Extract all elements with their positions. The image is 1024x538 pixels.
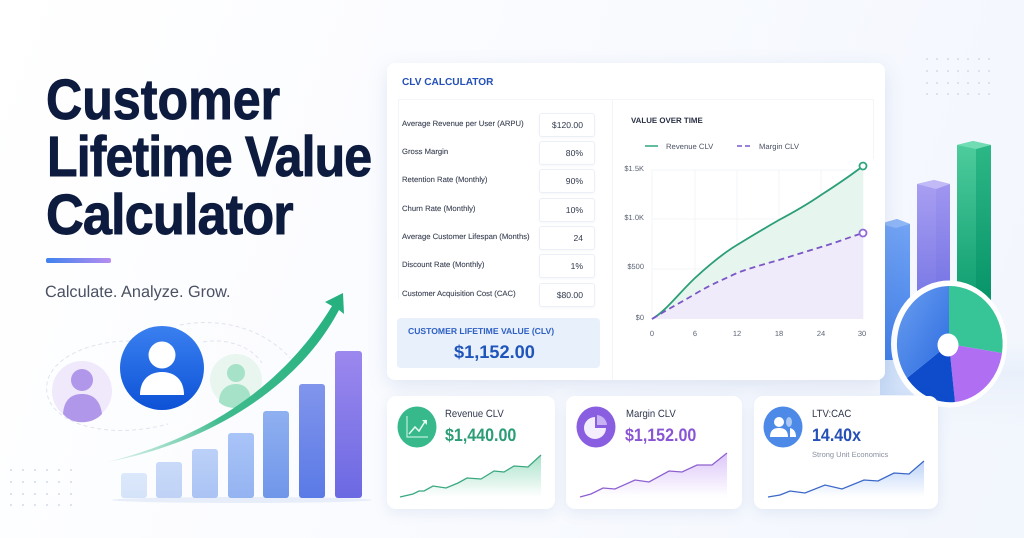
3D bar: purple — [917, 180, 950, 310]
sparkline: LTV to CAC — [768, 461, 924, 497]
icon: green line chart — [398, 406, 436, 448]
margin line — [652, 233, 863, 319]
result box: customer lifetime value: $1,152.00 — [454, 342, 535, 362]
dots: top right — [926, 58, 990, 95]
input rows: $80.00 — [557, 290, 583, 300]
input rows: Average Customer Lifespan (Months) — [402, 232, 530, 241]
pie chart — [891, 280, 1007, 408]
input rows: 90% — [566, 176, 583, 186]
chart axis labels: 0 — [650, 329, 654, 338]
chart axis labels: 12 — [733, 329, 741, 338]
chart grid — [652, 170, 863, 319]
chart legend: Margin CLV — [759, 142, 800, 151]
chart axis labels: 6 — [693, 329, 697, 338]
input rows: Retention Rate (Monthly) — [402, 175, 487, 184]
margin area — [652, 233, 863, 319]
pale shadow behind pie — [880, 340, 1024, 450]
revenue line — [652, 166, 863, 319]
3D bar: green — [957, 141, 991, 300]
end markers — [860, 162, 866, 236]
chart axis labels: $1.5K — [624, 164, 644, 173]
card: revenue CLV — [387, 396, 555, 509]
dots: bottom left — [10, 469, 72, 506]
card note: Strong Unit Economics — [812, 450, 888, 459]
input rows: Gross Margin — [402, 147, 448, 156]
sparkline: revenue — [400, 455, 541, 497]
3D bar: blue — [880, 219, 910, 360]
chart legend — [645, 142, 800, 151]
chart axis labels: $500 — [627, 262, 644, 271]
arrow: growth trend — [107, 293, 344, 462]
card: margin CLV — [566, 396, 742, 509]
input rows: 80% — [566, 148, 583, 158]
input rows: 1% — [571, 261, 583, 271]
chart axis labels: $0 — [636, 313, 644, 322]
chart heading: VALUE OVER TIME — [631, 116, 703, 125]
icon: purple pie chart — [576, 406, 616, 448]
sparklines — [400, 452, 924, 498]
panel: CLV calculator — [387, 63, 885, 380]
chart legend: Revenue CLV — [666, 142, 714, 151]
icon: blue users — [764, 406, 802, 448]
title: Calculator — [46, 183, 293, 247]
input rows — [402, 113, 595, 307]
chart axis labels: 18 — [775, 329, 783, 338]
bar chart: growth bars — [112, 351, 372, 503]
input rows: $120.00 — [552, 120, 583, 130]
chart: value over time — [624, 116, 868, 338]
revenue area — [652, 166, 863, 319]
input rows: Discount Rate (Monthly) — [402, 260, 484, 269]
card name: Margin CLV — [626, 408, 676, 420]
icon: green user avatar — [210, 354, 262, 408]
input rows: 24 — [573, 233, 583, 243]
icon: purple user avatar — [52, 361, 112, 422]
title — [46, 68, 371, 247]
input rows: Average Revenue per User (ARPU) — [402, 119, 524, 128]
accent underline — [46, 258, 111, 262]
dashed orbit lines — [47, 323, 290, 430]
result box: customer lifetime value: CUSTOMER LIFETIME VALUE (CLV) — [408, 326, 554, 336]
input rows: Customer Acquisition Cost (CAC) — [402, 289, 516, 298]
card name: Revenue CLV — [445, 408, 504, 420]
card value: 14.40x — [812, 425, 861, 445]
chart axis labels — [624, 164, 866, 338]
card: LTV to CAC — [754, 396, 938, 509]
sparkline: margin — [580, 453, 727, 497]
card value: $1,152.00 — [625, 425, 696, 445]
card value: $1,440.00 — [445, 425, 516, 445]
icon: blue user avatar — [120, 326, 204, 410]
tagline: Calculate. Analyze. Grow. — [45, 283, 231, 301]
panel heading: CLV CALCULATOR — [402, 77, 493, 88]
chart axis labels: $1.0K — [624, 213, 644, 222]
title: Customer — [46, 68, 280, 132]
card name: LTV:CAC — [812, 408, 851, 420]
input rows: Churn Rate (Monthly) — [402, 204, 476, 213]
chart axis labels: 24 — [817, 329, 825, 338]
input rows: 10% — [566, 205, 583, 215]
title: Lifetime Value — [47, 125, 371, 189]
result box: customer lifetime value — [397, 318, 600, 368]
chart axis labels: 30 — [858, 329, 866, 338]
